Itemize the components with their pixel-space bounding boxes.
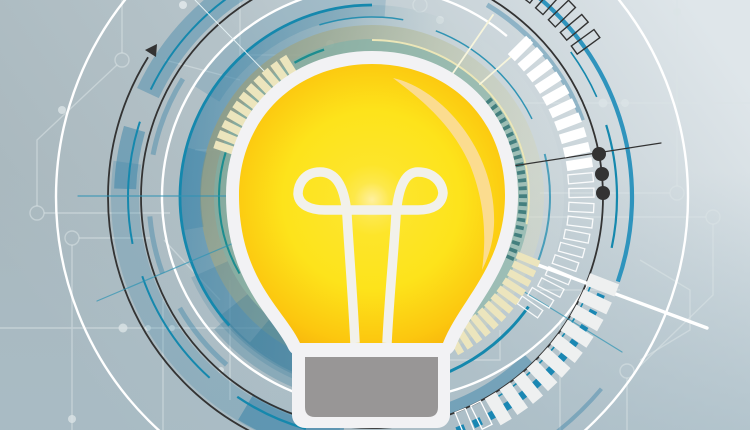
ring discs (180, 5, 564, 389)
grey-white ticks lower right (485, 273, 619, 425)
outlined ticks bottom (455, 401, 492, 430)
screw base (305, 357, 438, 417)
dark outlined ticks top right (493, 0, 600, 54)
cream ticks lower right (446, 252, 540, 355)
dark nodes (592, 147, 610, 200)
bulb glass (239, 64, 505, 343)
glass highlight (393, 78, 494, 270)
filament (298, 172, 443, 343)
white outlined ticks right (517, 173, 594, 318)
thin crossing lines (78, 0, 707, 352)
collar band (293, 343, 450, 357)
dark circuit ring (141, 0, 603, 428)
cream ticks upper left (213, 55, 297, 154)
white ticks upper right (508, 36, 593, 171)
bulb outline (239, 64, 505, 415)
white inner ring (103, 0, 641, 430)
light bulb (239, 64, 505, 417)
